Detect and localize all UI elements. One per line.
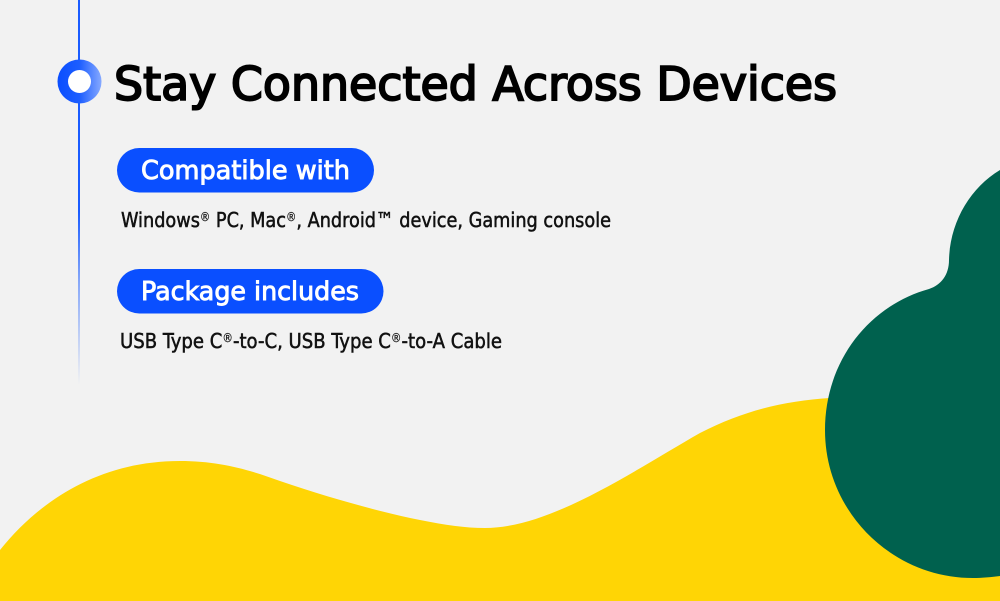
compatibility list: , Android™ device, Gaming console [296, 208, 611, 232]
title: Stay Connected Across Devices [114, 57, 837, 111]
package contents: ® [391, 331, 402, 345]
timeline line [78, 0, 80, 385]
compatibility list: ® [200, 210, 210, 224]
compatibility list: ® [286, 210, 296, 224]
badge: compatible with [117, 148, 374, 192]
badge: compatible with: Compatible with [141, 156, 350, 186]
package contents: USB Type C [120, 329, 225, 353]
package contents: -to-A Cable [402, 329, 502, 353]
timeline marker [58, 60, 102, 104]
badge: package includes [117, 269, 384, 314]
compatibility list: PC, Mac [210, 208, 286, 232]
package contents: ® [222, 331, 233, 345]
package contents: -to-C, USB Type C [233, 329, 391, 353]
yellow wave [0, 398, 1000, 601]
badge: package includes: Package includes [141, 277, 359, 307]
compatibility list: Windows [121, 208, 203, 232]
green blob [825, 170, 1000, 578]
